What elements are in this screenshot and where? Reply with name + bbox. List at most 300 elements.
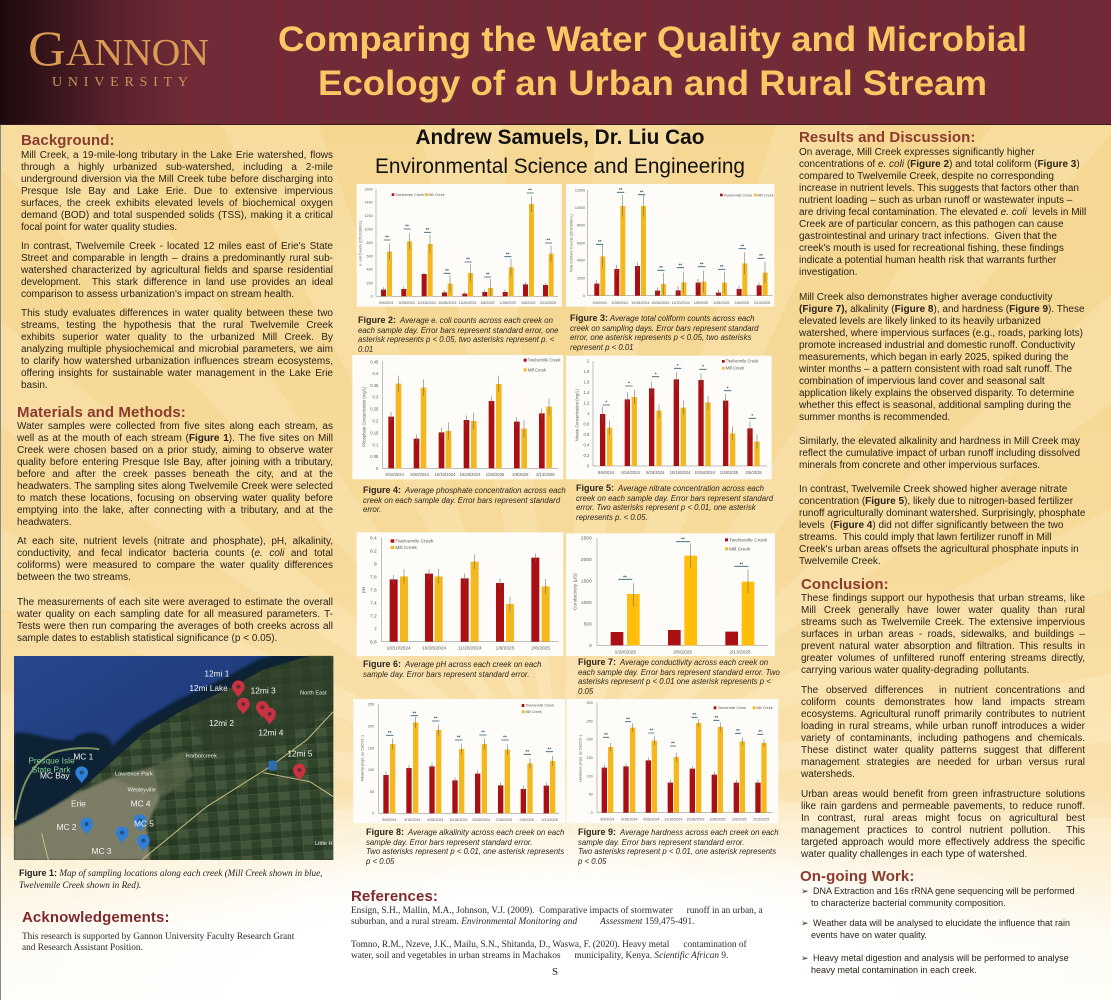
- chart: figure 8 alkalinity: Alkalinity (mg/L as CaCO3 -): [360, 735, 364, 781]
- chart: figure 4 phosphate concentration: 0.15: [370, 430, 379, 435]
- chart: figure 5 nitrate concentration: *: [628, 381, 630, 386]
- chart: figure 9 hardness: **: [626, 716, 630, 721]
- text: background paragraphs: analyzing multiple physiochemical and microbial parameters, we aim: [21, 344, 333, 355]
- chart: figure 8 alkalinity: 0: [372, 812, 374, 816]
- text: materials and methods paragraphs: Water samples were collected from five sites along each stream, as: [17, 421, 333, 432]
- department: Environmental Science and Engineering: [375, 155, 745, 178]
- text: materials and methods paragraphs: quality before entering Presque Isle Bay, after joining with a tributary,: [17, 457, 333, 468]
- heading: conclusion: Conclusion:: [801, 576, 889, 593]
- figure 1: map of sampling locations: Lawrence Park: [115, 772, 153, 778]
- chart: figure 3 total coliform counts: 2000: [577, 276, 585, 280]
- text: materials and methods paragraphs: At each site, nutrient levels (nitrate and phosphate), pH, alkalinity,: [17, 536, 333, 547]
- text: conclusion: [801, 593, 1085, 860]
- chart: figure 2 e. coli counts: 9/28/2024: [399, 301, 415, 305]
- chart: figure 9 hardness: Twelvemile Creek: [717, 706, 746, 710]
- chart: figure 8 alkalinity: **: [481, 730, 485, 735]
- chart: figure 7 conductivity: Twelvemile Creek: [729, 537, 768, 543]
- chart: figure 4 phosphate concentration: [352, 355, 563, 479]
- chart: figure 2 e. coli counts: 1000: [365, 228, 373, 232]
- chart: figure 6 pH: 2/6/2025: [531, 645, 550, 651]
- chart: figure 8 alkalinity: [353, 699, 565, 823]
- chart: figure 2 e. coli counts: 200: [367, 281, 373, 285]
- chart: figure 5 nitrate concentration: *: [751, 413, 753, 418]
- chart: figure 2 e. coli counts: 2/6/2025: [521, 301, 535, 305]
- text: results and discussion: On average, Mill Creek expresses significantly higher concentrations of e. coli (Figure 2) and total coliform (Figure 3) compared to Twelvemile Creek, despite no corresponding increase in nutrient levels. This suggests that factors other than nutrient loading – such as urban runoff or wastewater inputs – are driving fecal contamination. The elevated e. coli levels in Mill Creek are of particular concern, as this pathogen can cause gastrointestinal and urinary tract infections. Given that the creek's mouth is used for recreational fishing, these findings indicate a potential human health risk that warrants further investigation.: [799, 147, 1086, 278]
- text: materials and methods paragraphs: Creek were chosen based on a prior study, aiming to observe water: [17, 445, 333, 456]
- text: conclusion: coliform counts demonstrates how land impacts stream: [801, 697, 1085, 708]
- chart: figure 9 hardness: 1/28/2025: [709, 817, 725, 821]
- chart: figure 4 phosphate concentration: 9/10/2024: [385, 472, 405, 477]
- chart: figure 8 alkalinity: 50: [370, 790, 374, 794]
- chart: figure 2 e. coli counts: Twelvemile Creek: [395, 193, 424, 197]
- text: background paragraphs: to clarify how watershed urbanization influences stream ecosystems,: [21, 356, 333, 367]
- title: [278, 20, 1027, 103]
- text: results third paragraph: Similarly, the elevated alkalinity and hardness in Mill Creek may reflect the cumulative impact of urban runoff including dissolved minerals from concrete and other impervious surfaces.: [799, 436, 1080, 471]
- chart: figure 8 alkalinity: **: [526, 749, 529, 754]
- chart: figure 8 alkalinity: 100: [368, 768, 374, 772]
- text: materials and methods paragraphs: The measurements of each site were averaged to estimate the overall: [17, 597, 333, 608]
- chart: figure 9 hardness: 200: [587, 738, 593, 742]
- text: results fourth paragraph: In contrast, Twelvemile Creek showed higher average nitrate concentration (Figure 5), likely due to nitrogen-based fertilizer runoff agriculturally dominant watershed. Surprisingly, phosphate levels (Figure 4) did not differ significantly between the two streams. This could imply that lawn fertilizer runoff in Mill Creek's urban areas offsets the agricultural phosphate inputs in Twelvemile Creek.: [799, 484, 1085, 567]
- text: conclusion: prevent natural water absorption and filtration. This results in: [801, 641, 1085, 652]
- text: background paragraphs: streams, testing the hypothesis that the rural Twelvemile Creek: [21, 320, 333, 331]
- chart: figure 9 hardness: 10/16/2024: [664, 817, 682, 821]
- caption: figure 5: Figure 5: Average nitrate concentration across each creek on each sample day. Error bars represent standard error. Two asterisks represent p < 0.01, one asterisk represents p. < 0.05.: [576, 483, 773, 522]
- chart: figure 4 phosphate concentration: 1/28/2025: [486, 472, 505, 477]
- chart: figure 3 total coliform counts: Total Coliform Counts (CFU/100mL): [570, 214, 574, 272]
- chart: figure 7 conductivity: 1500: [581, 578, 592, 584]
- chart: figure 5 nitrate concentration: *: [605, 400, 607, 405]
- chart: figure 8 alkalinity: 2/13/2025: [542, 818, 558, 822]
- figure 1: map of sampling locations: 12mi 1: [204, 669, 230, 679]
- chart: figure 7 conductivity: [566, 533, 775, 656]
- chart: figure 4 phosphate concentration: 0.35: [370, 383, 379, 388]
- heading: background: Background:: [21, 132, 115, 149]
- chart: figure 4 phosphate concentration: Twelvemile Creek: [528, 358, 561, 363]
- text: materials and methods paragraphs: coliforms) were measured to compare the water quality differences: [17, 560, 333, 571]
- chart: figure 9 hardness: 0: [591, 811, 593, 815]
- chart: figure 2 e. coli counts: 11/20/2024: [458, 301, 476, 305]
- chart: figure 5 nitrate concentration: [566, 356, 772, 479]
- logo: Gannon University: UNIVERSITY: [52, 75, 188, 90]
- chart: figure 3 total coliform counts: 4000: [577, 259, 585, 263]
- figure 1: map of sampling locations: MC 4: [131, 799, 151, 809]
- text: background paragraphs: Mill Creek, a 19-mile-long tributary in the Lake Erie watershed, flows: [21, 150, 333, 161]
- chart: figure 3 total coliform counts: Twelvemile Creek: [723, 193, 752, 197]
- heading: materials and methods: Materials and Methods:: [17, 404, 186, 421]
- chart: figure 2 e. coli counts: **: [528, 188, 532, 193]
- figure 1: map of sampling locations: MC 5: [134, 819, 154, 829]
- chart: figure 3 total coliform counts: 10/28/2024: [651, 301, 669, 305]
- chart: figure 5 nitrate concentration: 1.6: [584, 380, 590, 385]
- chart: figure 3 total coliform counts: **: [679, 262, 682, 267]
- heading: acknowledgements: Acknowledgements:: [22, 909, 170, 926]
- text: background paragraphs: watershed characterized by agricultural fields and sparse residential: [21, 265, 333, 276]
- chart: figure 8 alkalinity: 9/9/2024: [382, 818, 396, 822]
- title: Comparing the Water Quality and Microbial: [278, 20, 1027, 59]
- authors: Andrew Samuels, Dr. Liu Cao: [416, 126, 704, 149]
- chart: figure 3 total coliform counts: 8000: [577, 224, 585, 228]
- chart: figure 3 total coliform counts: **: [700, 261, 704, 266]
- figure 1: map of sampling locations: Presque Isle: [28, 755, 75, 765]
- chart: figure 3 total coliform counts: 1/8/2025: [694, 301, 708, 305]
- text: conclusion: streams such as Twelvemile Creek. The extensive impervious: [801, 617, 1085, 628]
- caption: figure 2: Figure 2: Average e. coli counts across each creek on each sample day. Error bars represent standard error, one asterisk represents p < 0.05, two asterisks represent p. < 0.01: [358, 315, 559, 354]
- text: materials and methods paragraphs: emptying into the lake, after connecting with a tributary, and at the: [17, 505, 333, 516]
- chart: figure 6 pH: Twelvemile Creek: [395, 539, 434, 545]
- caption: figure 4: Figure 4: Average phosphate concentration across each creek on each sample day. Error bars represent standard error.: [363, 485, 566, 514]
- chart: figure 8 alkalinity: **: [434, 716, 438, 721]
- chart: figure 2 e. coli counts: Mill Creek: [428, 193, 445, 197]
- chart: figure 4 phosphate concentration: 0.2: [373, 419, 379, 424]
- chart: figure 9 hardness: 150: [587, 756, 593, 760]
- chart: figure 6 pH: 6.8: [370, 639, 377, 645]
- figure 1: map of sampling locations: MC 3: [92, 846, 112, 856]
- chart: figure 3 total coliform counts: 12000: [575, 188, 585, 192]
- chart: figure 6 pH: pH: [361, 586, 367, 593]
- chart: figure 7 conductivity: 2/13/2025: [729, 650, 751, 656]
- chart: figure 2 e. coli counts: 1400: [365, 201, 373, 205]
- chart: figure 8 alkalinity: 2/6/2025: [520, 818, 534, 822]
- chart: figure 5 nitrate concentration: 9/18/2024: [621, 470, 641, 475]
- chart: figure 7 conductivity: **: [623, 574, 627, 579]
- chart: figure 9 hardness: Hardness (mg/L as CaCO3 -): [579, 735, 583, 782]
- text: background paragraphs: This study evaluates differences in water quality between these two: [21, 308, 333, 319]
- text: background paragraphs: basin.: [21, 380, 48, 391]
- figure 1: map of sampling locations: 12mi Lake: [189, 683, 228, 693]
- chart: figure 9 hardness: **: [736, 728, 740, 733]
- chart: figure 3 total coliform counts: Mill Creek: [757, 193, 774, 197]
- chart: figure 2 e. coli counts: **: [547, 238, 550, 243]
- chart: figure 5 nitrate concentration: Nitrate Concentration (mg/L): [574, 388, 579, 441]
- text: conclusion: surfaces in urban areas - roads, sidewalks, and buildings –: [801, 629, 1085, 640]
- chart: figure 4 phosphate concentration: 10/10/2024: [435, 472, 456, 477]
- title: Ecology of an Urban and Rural Stream: [318, 64, 987, 103]
- figure 1: map of sampling locations: Harborcreek: [186, 753, 217, 759]
- figure 1: map of sampling locations: Wesleyville: [128, 787, 156, 793]
- chart: figure 2 e. coli counts: **: [486, 272, 490, 277]
- chart: figure 2 e. coli counts: **: [445, 268, 449, 273]
- chart: figure 9 hardness: **: [671, 741, 675, 746]
- chart: figure 5 nitrate concentration: 9/28/2024: [646, 470, 665, 475]
- chart: figure 4 phosphate concentration: 9/20/2024: [410, 472, 430, 477]
- figure 1: map of sampling locations: MC 1: [73, 751, 94, 761]
- chart: figure 8 alkalinity: 9/28/2024: [427, 818, 443, 822]
- chart: figure 3 total coliform counts: **: [720, 264, 724, 269]
- chart: figure 6 pH: 7.8: [370, 574, 377, 580]
- figure 1: map of sampling locations: 12mi 2: [209, 718, 234, 728]
- text: materials and methods paragraphs: sample dates to establish statistical significance (p < 0.05).: [17, 633, 277, 644]
- chart: figure 2 e. coli counts: 400: [367, 268, 373, 272]
- chart: figure 9 hardness: 10/28/2024: [686, 817, 704, 821]
- chart: figure 5 nitrate concentration: *: [677, 363, 679, 368]
- text: conclusion: watersheds.: [801, 769, 855, 780]
- text: conclusion: These findings support our hypothesis that urban streams, like: [801, 593, 1085, 604]
- chart: figure 8 alkalinity: **: [548, 746, 551, 751]
- chart: figure 9 hardness: Mill Creek: [756, 706, 773, 710]
- text: background paragraphs: [21, 150, 333, 391]
- chart: figure 8 alkalinity: **: [457, 735, 461, 740]
- chart: figure 5 nitrate concentration: 9/9/2024: [598, 470, 615, 475]
- text: background paragraphs: In contrast, Twelvemile Creek - located 12 miles east of Erie's State: [21, 241, 333, 252]
- text: materials and methods paragraphs: water quality on each sampling date for all measured parameters. T-: [17, 609, 333, 620]
- text: background paragraphs: Presque Isle Bay and Lake Erie. Due to extensive impervious: [21, 186, 333, 197]
- chart: figure 7 conductivity: 2/6/2025: [673, 650, 692, 656]
- chart: figure 6 pH: 11/20/2024: [458, 645, 482, 651]
- chart: figure 5 nitrate concentration: *: [655, 371, 657, 376]
- figure 1: map of sampling locations: North East: [300, 690, 327, 696]
- chart: figure 9 hardness: 50: [589, 793, 593, 797]
- chart: figure 6 pH: Mill Creek: [395, 545, 417, 551]
- chart: figure 3 total coliform counts: 1/28/2025: [713, 301, 729, 305]
- chart: figure 9 hardness: 100: [587, 774, 593, 778]
- text: conclusion: greater volumes of unfiltered runoff entering streams directly,: [801, 653, 1085, 664]
- text: conclusion: management strategies are needed for urban versus rural: [801, 757, 1085, 768]
- chart: figure 3 total coliform counts: **: [640, 189, 644, 194]
- figure 1: map of sampling locations: 12mi 3: [251, 685, 276, 695]
- chart: figure 2 e. coli counts: 2/13/2025: [540, 301, 556, 305]
- heading: references: References:: [351, 888, 438, 905]
- chart: figure 4 phosphate concentration: 0.25: [370, 407, 379, 412]
- figure 1: map of sampling locations: [14, 656, 333, 860]
- chart: figure 7 conductivity: **: [740, 561, 743, 566]
- text: conclusion: ecosystems. Agricultural runoff primarily contributes to nutrient: [801, 709, 1085, 720]
- text: background paragraphs: offering insights for sustainable water management in the Lake Erie: [21, 368, 333, 379]
- caption: figure 7: Figure 7: Average conductivity across each creek on each sample day. Error bars represent standard error. Two asterisks represent p < 0.01 one asterisk represents p < 0.05: [578, 657, 780, 696]
- chart: figure 9 hardness: 9/9/2024: [600, 817, 614, 821]
- chart: figure 6 pH: 10/28/2024: [422, 645, 446, 651]
- chart: figure 3 total coliform counts: [566, 184, 774, 307]
- caption: figure 6: Figure 6: Average pH across each creek on each sample day. Error bars represent standard error.: [363, 659, 541, 679]
- text: materials and methods paragraphs: well as at the mouth of each stream (Figure 1). The five sites on Mill: [17, 433, 333, 444]
- text: acknowledgements: This research is supported by Gannon University Faculty Research Grant and Research Assistant Position.: [22, 932, 294, 953]
- chart: figure 5 nitrate concentration: 0.8: [584, 422, 590, 427]
- text: conclusion: These distinct water quality patterns suggest that different: [801, 745, 1085, 756]
- chart: figure 3 total coliform counts: **: [759, 253, 763, 258]
- text: materials and methods paragraphs: conductivity, and fecal indicator bacteria counts (e. coli and total: [17, 548, 333, 559]
- header band: [0, 0, 1111, 125]
- chart: figure 8 alkalinity: **: [503, 735, 507, 740]
- chart: figure 4 phosphate concentration: Phosphate Concentration (mg/L): [361, 386, 366, 447]
- chart: figure 4 phosphate concentration: 2/6/2025: [512, 472, 529, 477]
- chart: figure 9 hardness: 250: [587, 719, 593, 723]
- chart: figure 7 conductivity: 0: [589, 643, 592, 649]
- text: conclusion: Mill Creek generally have lower water quality than rural: [801, 605, 1085, 616]
- chart: figure 7 conductivity: 1/28/2025: [615, 650, 636, 656]
- text: conclusion: variety of contaminants, including pathogens and chemicals.: [801, 733, 1085, 744]
- chart: figure 4 phosphate concentration: 0.1: [373, 442, 379, 447]
- chart: figure 4 phosphate concentration: 10/28/2024: [460, 472, 481, 477]
- chart: figure 7 conductivity: Conductivity (µS): [573, 573, 579, 610]
- chart: figure 5 nitrate concentration: 10/28/2024: [694, 470, 716, 475]
- chart: figure 9 hardness: **: [693, 712, 696, 717]
- heading: on-going work: On-going Work:: [800, 868, 914, 885]
- chart: figure 3 total coliform counts: 2/6/2025: [735, 301, 749, 305]
- figure 1: map of sampling locations: 12mi 4: [258, 727, 284, 737]
- chart: figure 2 e. coli counts: [357, 184, 562, 307]
- figure 1: map of sampling locations: Little H: [315, 841, 333, 847]
- chart: figure 2 e. coli counts: 800: [367, 241, 373, 245]
- chart: figure 2 e. coli counts: 10/28/2024: [438, 301, 456, 305]
- chart: figure 6 pH: 7.4: [370, 600, 377, 606]
- chart: figure 4 phosphate concentration: Mill Creek: [528, 367, 547, 372]
- chart: figure 2 e. coli counts: 1600: [365, 187, 373, 191]
- text: materials and methods paragraphs: headwaters.: [17, 517, 71, 528]
- text: references: Ensign, S.H., Mallin, M.A., Johnson, V.J. (2009). Comparative impacts of stormwater runoff in an urban, a suburban, and a rural stream. Environmental Monitoring and Assessment 159,475-491. Tomno, R.M., Nzeve, J.K., Mailu, S.N., Shitanda, D., Waswa, F. (2020). Heavy metal contamination of water, soil and vegetables in urban streams in Machakos municipality, Kenya. Scientific African 9.: [351, 906, 763, 961]
- figure 1: map of sampling locations: 12mi 5: [287, 749, 313, 759]
- chart: figure 9 hardness: 2/6/2025: [732, 817, 746, 821]
- chart: figure 8 alkalinity: Mill Creek: [525, 710, 542, 714]
- chart: figure 3 total coliform counts: 10/18/2024: [631, 301, 649, 305]
- list: on-going work bullets: ➢ Heavy metal digestion and analysis will be performed to analyse heavy metal contamination in each creek.: [801, 953, 1069, 974]
- chart: figure 4 phosphate concentration: 2/13/2025: [536, 472, 555, 477]
- caption: figure 8: Figure 8: Average alkalinity across each creek on each sample day. Error bars represent standard error. Two asterisks represent p < 0.01, one asterisk represents p < 0.05: [366, 827, 564, 866]
- chart: figure 6 pH: 10/10/2024: [387, 645, 411, 651]
- caption: figure 3: Figure 3: Average total coliform counts across each creek on sampling days. Error bars represent standard error, one asterisk represents p < 0.05, two asterisks represent p < 0.01: [570, 313, 759, 352]
- chart: figure 4 phosphate concentration: 0.45: [370, 359, 379, 364]
- text: results second paragraph: Mill Creek also demonstrates higher average conductivity (Figure 7), alkalinity (Figure 8), and hardness (Figure 9). These elevated levels are likely linked to its heavily urbanized watershed, where impervious surfaces (e.g., roads, parking lots) promote increased industrial and domestic runoff. Conductivity measurements, which began in early 2025, spiked during the winter months – a pattern consistent with road salt runoff. The combination of impervious land cover and seasonal salt application likely explains the observed disparity. To determine whether this effect is seasonal, additional sampling during the summer months is recommended.: [799, 292, 1085, 423]
- chart: figure 9 hardness: **: [650, 728, 653, 733]
- caption: figure 1: Figure 1: Map of sampling locations along each creek (Mill Creek shown in blue, Twelvemile Creek shown in Red).: [19, 868, 322, 890]
- chart: figure 9 hardness: 9/28/2024: [643, 817, 659, 821]
- chart: figure 5 nitrate concentration: Mill Creek: [726, 366, 745, 371]
- chart: figure 9 hardness: 2/13/2025: [753, 817, 769, 821]
- list: on-going work bullets: [801, 886, 1075, 975]
- text: materials and methods paragraphs: before and after the creek passes beneath the city, and at the: [17, 469, 333, 480]
- text: background paragraphs: through a highly urbanized sub-watershed, including a 2-mile: [21, 162, 333, 173]
- text: materials and methods paragraphs: [17, 421, 333, 644]
- chart: figure 9 hardness: 9/18/2024: [621, 817, 637, 821]
- chart: figure 8 alkalinity: **: [388, 730, 392, 735]
- chart: figure 4 phosphate concentration: 0.05: [370, 454, 379, 459]
- chart: figure 5 nitrate concentration: 1/28/2025: [720, 470, 739, 475]
- chart: figure 5 nitrate concentration: 1.8: [584, 369, 590, 374]
- chart: figure 5 nitrate concentration: 0.6: [584, 432, 590, 437]
- text: background paragraphs: underground diversion via the Mill Creek tube before discharging into: [21, 174, 333, 185]
- chart: figure 3 total coliform counts: **: [619, 187, 623, 192]
- chart: figure 6 pH: 7: [374, 626, 377, 632]
- chart: figure 8 alkalinity: 250: [368, 703, 374, 707]
- text: conclusion: like rain gardens and permeable pavements, to reduce runoff.: [801, 801, 1085, 812]
- chart: figure 7 conductivity: 1000: [581, 600, 592, 606]
- chart: figure 2 e. coli counts: 1/28/2025: [500, 301, 516, 305]
- figure 1: map of sampling locations: MC 2: [57, 822, 77, 832]
- chart: figure 7 conductivity: 2000: [581, 557, 592, 563]
- chart: figure 5 nitrate concentration: 0.2: [584, 453, 590, 458]
- chart: figure 5 nitrate concentration: 1.4: [584, 390, 590, 395]
- figure 1: map of sampling locations: Erie: [71, 799, 86, 809]
- chart: figure 5 nitrate concentration: *: [727, 385, 729, 390]
- text: background paragraphs: exhibits superior water quality to the urbanized Mill Creek. By: [21, 332, 333, 343]
- chart: figure 7 conductivity: 2500: [581, 535, 592, 541]
- chart: figure 2 e. coli counts: 0: [371, 295, 373, 299]
- chart: figure 5 nitrate concentration: 1: [587, 411, 590, 416]
- chart: figure 8 alkalinity: 150: [368, 746, 374, 750]
- chart: figure 6 pH: 8.2: [370, 548, 377, 554]
- text: materials and methods paragraphs: headwaters. The sampling sites along Twelvemile Creek were selected: [17, 481, 333, 492]
- chart: figure 8 alkalinity: Twelvemile Creek: [525, 704, 554, 708]
- chart: figure 6 pH: 7.6: [370, 587, 377, 593]
- chart: figure 3 total coliform counts: 0: [583, 294, 585, 298]
- chart: figure 6 pH: 7.2: [370, 613, 377, 619]
- text: conclusion: carrying various water quality-degrading pollutants.: [801, 665, 1029, 676]
- logo: Gannon University: GANNON: [28, 20, 209, 76]
- list: on-going work bullets: ➢ DNA Extraction and 16s rRNA gene sequencing will be performed to characterize bacterial community composition.: [801, 886, 1075, 908]
- stray letter: S: [552, 966, 558, 978]
- text: background paragraphs: Street and comparable in length – drains a predominantly rural sub-: [21, 253, 333, 264]
- chart: figure 2 e. coli counts: 1/8/2025: [480, 301, 494, 305]
- chart: figure 6 pH: 8.4: [370, 535, 377, 541]
- figure 1: map of sampling locations: State Park: [32, 765, 71, 775]
- chart: figure 3 total coliform counts: 6000: [577, 241, 585, 245]
- chart: figure 9 hardness: [567, 699, 778, 823]
- chart: figure 3 total coliform counts: **: [741, 243, 744, 248]
- chart: figure 6 pH: [357, 532, 563, 656]
- chart: figure 9 hardness: **: [759, 729, 762, 734]
- chart: figure 7 conductivity: 500: [584, 621, 592, 627]
- chart: figure 3 total coliform counts: 9/28/2024: [612, 301, 628, 305]
- text: background paragraphs: surfaces, the creek exhibits elevated levels of biochemical oxygen: [21, 198, 333, 209]
- text: background paragraphs: comparison to assess urbanization's impact on stream health.: [21, 289, 294, 300]
- text: conclusion: management practices to control nutrient pollution. This: [801, 825, 1085, 836]
- text: conclusion: In contrast, rural areas might focus on agricultural best: [801, 813, 1085, 824]
- chart: figure 5 nitrate concentration: 0.4: [584, 443, 590, 448]
- chart: figure 6 pH: 1/8/2025: [496, 645, 515, 651]
- chart: figure 7 conductivity: **: [681, 537, 685, 542]
- text: background paragraphs: focal point for water quality studies.: [21, 222, 177, 233]
- chart: figure 5 nitrate concentration: Twelvemile Creek: [726, 359, 759, 364]
- chart: figure 3 total coliform counts: **: [598, 239, 602, 244]
- chart: figure 2 e. coli counts: e. coli Counts (CFU/100mL): [359, 221, 363, 266]
- chart: figure 8 alkalinity: 1/28/2025: [496, 818, 512, 822]
- chart: figure 2 e. coli counts: 9/9/2024: [379, 301, 393, 305]
- chart: figure 3 total coliform counts: 10000: [575, 206, 585, 210]
- chart: figure 4 phosphate concentration: 0.4: [373, 371, 379, 376]
- chart: figure 2 e. coli counts: **: [466, 257, 470, 262]
- chart: figure 2 e. coli counts: 10/18/2024: [418, 301, 436, 305]
- chart: figure 2 e. coli counts: **: [385, 235, 389, 240]
- chart: figure 7 conductivity: Mill Creek: [729, 546, 751, 552]
- chart: figure 5 nitrate concentration: *: [702, 364, 704, 369]
- chart: figure 5 nitrate concentration: 2/8/2025: [746, 470, 762, 475]
- chart: figure 8 alkalinity: 10/28/2024: [472, 818, 490, 822]
- chart: figure 8 alkalinity: 200: [368, 724, 374, 728]
- chart: figure 4 phosphate concentration: 0: [376, 466, 379, 471]
- text: materials and methods paragraphs: between the two streams.: [17, 572, 131, 583]
- chart: figure 2 e. coli counts: 1200: [365, 214, 373, 218]
- text: background paragraphs: demand (BOD) and total suspended solids (TSS), making it a critical: [21, 210, 333, 221]
- chart: figure 6 pH: 8: [374, 561, 377, 567]
- chart: figure 9 hardness: **: [604, 732, 608, 737]
- caption: figure 9: Figure 9: Average hardness across each creek on each sample day. Error bars represent standard error. Two asterisks represent p < 0.01, one asterisk represents p < 0.05: [578, 827, 779, 866]
- chart: figure 5 nitrate concentration: 0: [587, 464, 590, 469]
- text: materials and methods paragraphs: Tests were then run comparing the averages of both creeks across all: [17, 621, 333, 632]
- chart: figure 5 nitrate concentration: 1.2: [584, 401, 590, 406]
- chart: figure 8 alkalinity: 9/18/2024: [404, 818, 420, 822]
- chart: figure 3 total coliform counts: **: [659, 265, 663, 270]
- heading: results and discussion: Results and Discussion:: [799, 129, 976, 146]
- chart: figure 3 total coliform counts: 9/9/2024: [593, 301, 607, 305]
- chart: figure 2 e. coli counts: **: [426, 227, 429, 232]
- text: conclusion: loading in rural streams, while urban runoff introduces a wider: [801, 721, 1085, 732]
- chart: figure 2 e. coli counts: **: [405, 224, 409, 229]
- text: background paragraphs: development. This stark difference in land use provides an ideal: [21, 277, 333, 288]
- text: conclusion: The observed differences in nutrient concentrations and: [801, 685, 1085, 696]
- text: materials and methods paragraphs: to match these locations, focusing on observing water quality before: [17, 493, 333, 504]
- chart: figure 5 nitrate concentration: 10/16/2024: [670, 470, 691, 475]
- chart: figure 3 total coliform counts: 2/13/2025: [754, 301, 770, 305]
- text: conclusion: targeted approach would more effectively address the specific: [801, 837, 1085, 848]
